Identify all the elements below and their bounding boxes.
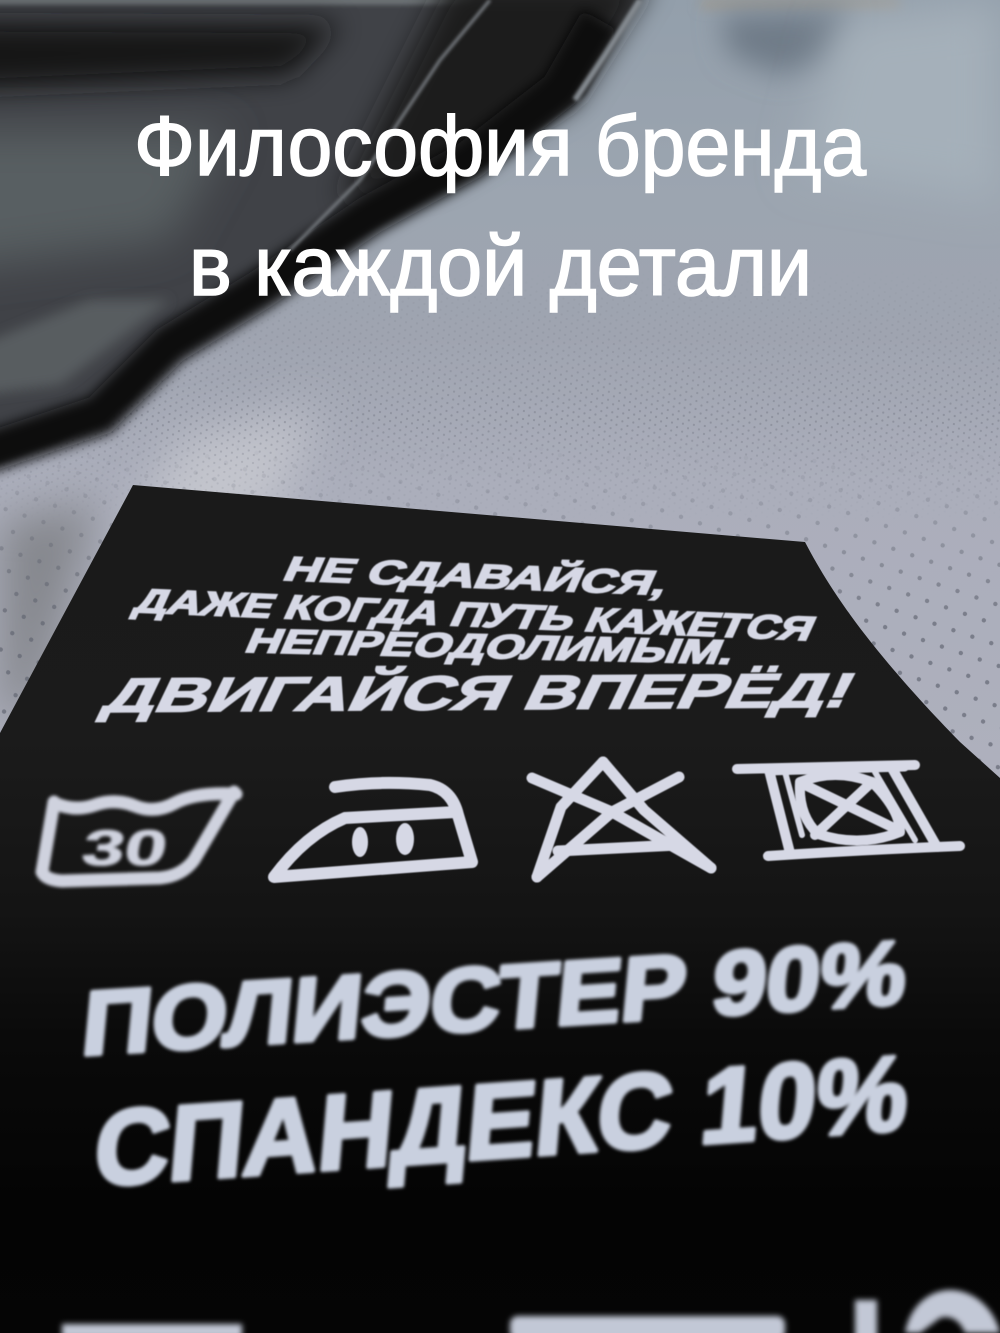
cut-off text at bottom edge <box>62 1290 1000 1333</box>
icon: crossed triangle <box>532 762 711 877</box>
icon: wash at 30 degrees: 30 <box>78 819 172 876</box>
label text: motto: НЕПРЕОДОЛИМЫМ. <box>240 622 743 672</box>
material composition text: СПАНДЕКС 10% <box>90 1032 914 1209</box>
label text: motto: НЕ СДАВАЙСЯ, <box>278 550 676 603</box>
material composition text: ПОЛИЭСТЕР 90% <box>78 922 911 1075</box>
icon: iron <box>274 783 472 877</box>
title: Философия бренда <box>134 99 866 193</box>
title <box>134 99 866 313</box>
icon: wash at 30 degrees <box>42 792 236 881</box>
background: light grey mesh fabric <box>0 0 1000 770</box>
label text: motto <box>95 550 866 722</box>
material composition text <box>78 922 914 1209</box>
dark fabric fold, top left <box>0 0 650 470</box>
icon: crossed tumble-dry square <box>737 765 960 856</box>
label body <box>0 485 1000 1333</box>
label text: motto: ДВИГАЙСЯ ВПЕРЁД! <box>95 663 866 722</box>
woven black care label <box>0 485 1000 1333</box>
title: в каждой детали <box>189 219 812 313</box>
label text: motto: ДАЖЕ КОГДА ПУТЬ КАЖЕТСЯ <box>129 583 822 648</box>
